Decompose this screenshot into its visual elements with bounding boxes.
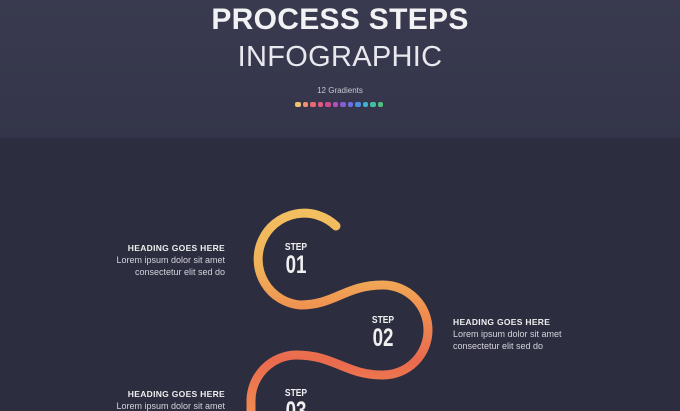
text block: step 1: Lorem ipsum dolor sit amet [116, 255, 225, 265]
text block: step 1: consectetur elit sed do [135, 267, 225, 277]
step 03 label [285, 388, 307, 411]
text block: step 2: HEADING GOES HERE [453, 317, 550, 327]
text block: step 3 [116, 389, 225, 411]
step 02 label: 02 [373, 324, 393, 352]
text block: step 2: consectetur elit sed do [453, 341, 543, 351]
step 02 label: STEP [372, 315, 394, 326]
step 01 label: STEP [285, 242, 307, 253]
text block: step 3: HEADING GOES HERE [128, 389, 225, 399]
text block: step 2 [453, 317, 562, 351]
step 01 label: 01 [286, 251, 306, 279]
caption: 12 gradients: 12 Gradients [317, 86, 363, 95]
text block: step 3: Lorem ipsum dolor sit amet [116, 401, 225, 411]
curve: steps 1-3 [251, 213, 428, 411]
text block: step 2: Lorem ipsum dolor sit amet [453, 329, 562, 339]
title: PROCESS STEPS [211, 3, 469, 36]
text block: step 1 [116, 243, 225, 277]
subtitle: INFOGRAPHIC [238, 41, 442, 73]
gradient swatches [295, 102, 383, 107]
text block: step 1: HEADING GOES HERE [128, 243, 225, 253]
step 03 label: STEP [285, 388, 307, 399]
header band [0, 0, 680, 138]
